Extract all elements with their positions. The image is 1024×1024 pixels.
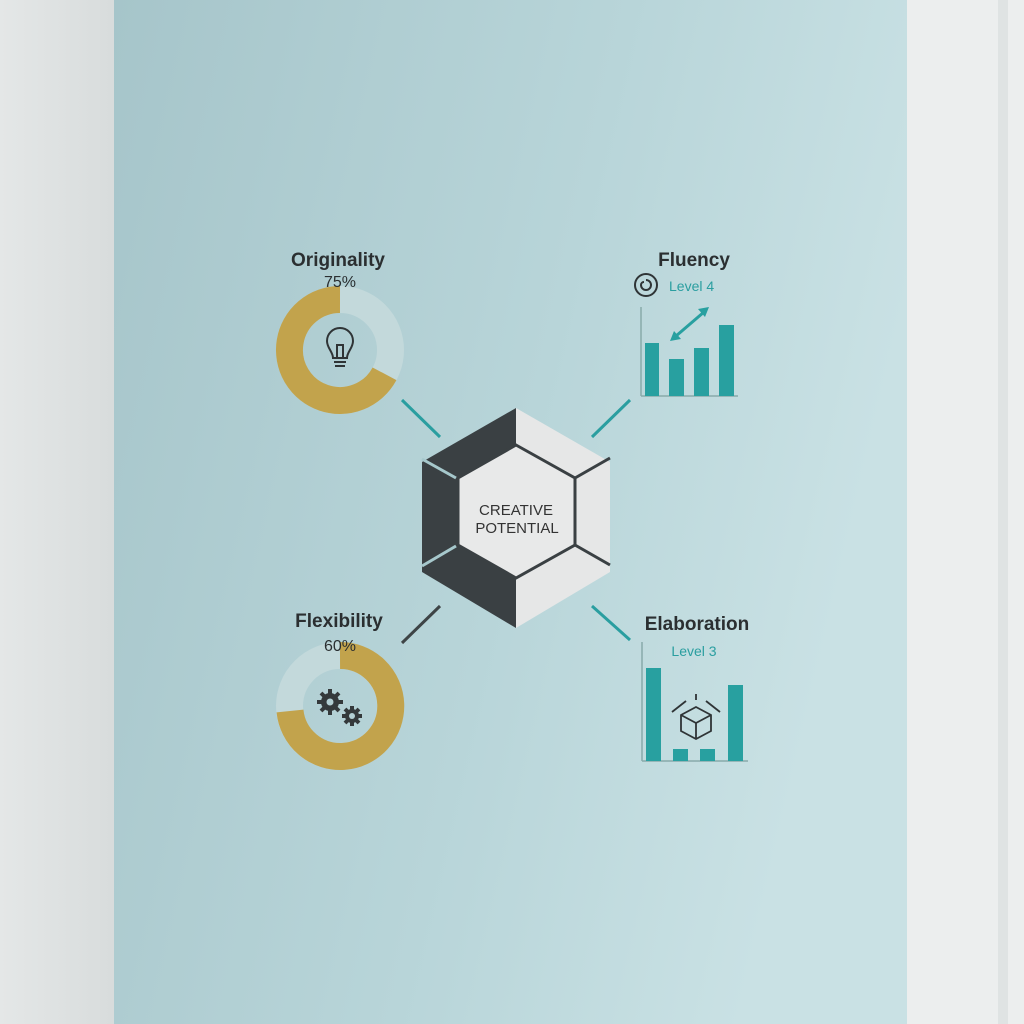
donut chart [290, 655, 391, 756]
right wall [907, 0, 1024, 1024]
panel: flexibility: 60% [324, 638, 356, 655]
panel: flexibility [290, 611, 391, 756]
panel: originality: 75% [324, 274, 356, 291]
background panel [114, 0, 907, 1024]
icon: spiral [635, 274, 657, 296]
hexagon: creative potential: POTENTIAL [475, 520, 559, 537]
panel: originality [289, 250, 390, 400]
panel: originality: Originality [291, 250, 385, 271]
icon: box with arrows [672, 694, 720, 739]
connector lines [402, 400, 630, 643]
panel: elaboration: Elaboration [645, 614, 749, 635]
hexagon: creative potential [422, 408, 610, 628]
donut chart [289, 300, 390, 400]
panel: elaboration [642, 614, 749, 761]
icon: lightbulb [327, 328, 353, 366]
panel: flexibility: Flexibility [295, 611, 383, 632]
left wall [0, 0, 114, 1024]
icon: gears [317, 689, 362, 726]
panel: fluency: Fluency [658, 250, 730, 271]
panel: elaboration: Level 3 [671, 643, 717, 659]
bar chart [641, 307, 738, 396]
center label: CREATIVE [479, 502, 553, 519]
panel: fluency: Level 4 [669, 278, 714, 294]
arrow [670, 307, 709, 341]
panel: fluency [635, 250, 738, 396]
bar chart [642, 642, 748, 761]
